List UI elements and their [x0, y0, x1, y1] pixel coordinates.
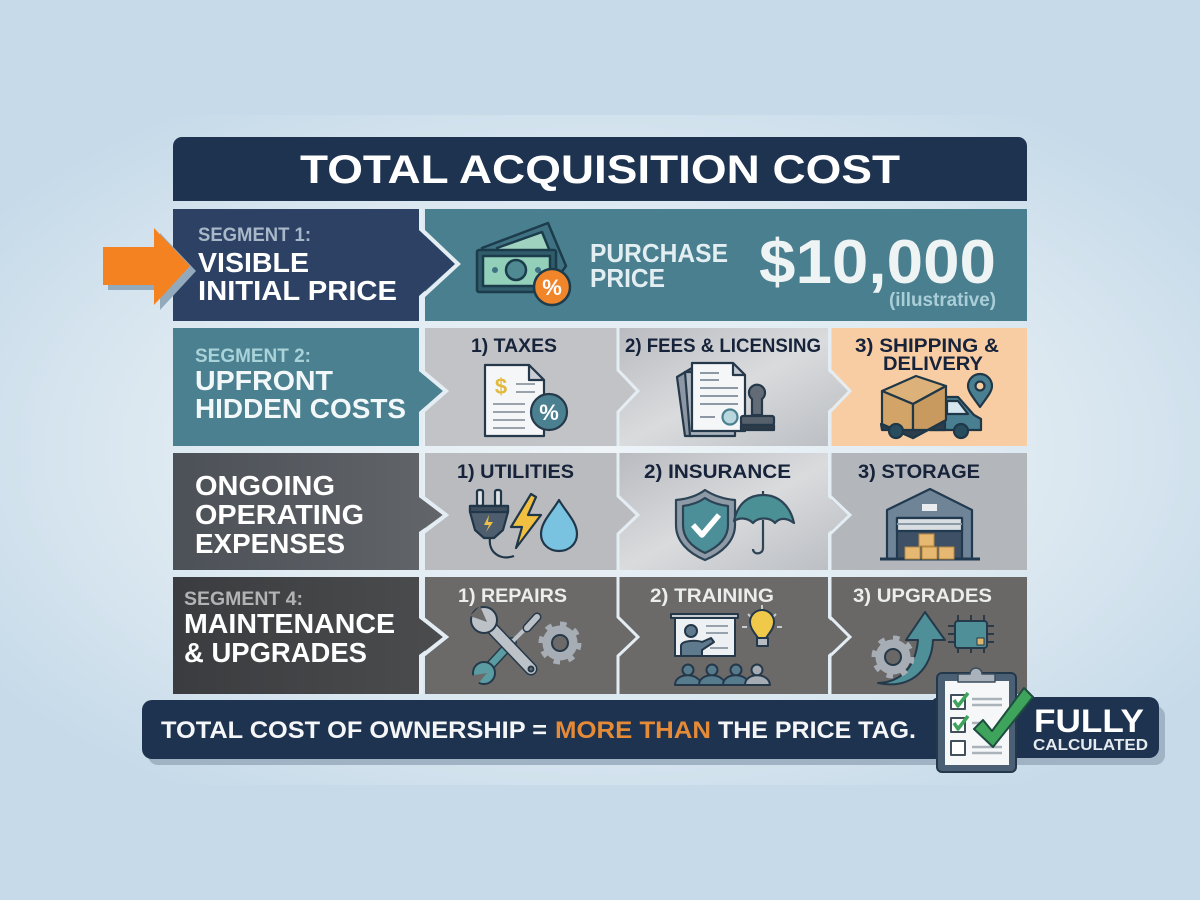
- panel: segment 2: UPFRONT: [195, 365, 333, 396]
- panel: segment 2: [173, 328, 446, 446]
- purchase price label: [590, 238, 728, 293]
- purchase price label: PRICE: [590, 263, 665, 293]
- footer banner: FULLY: [1034, 703, 1144, 739]
- cell: shipping and delivery: [831, 328, 1027, 446]
- cell: storage: [831, 453, 1027, 570]
- cell: training: [619, 577, 850, 694]
- cell: shipping and delivery: 3) SHIPPING &: [855, 336, 999, 357]
- panel: segment 3: EXPENSES: [195, 528, 345, 559]
- panel: segment 4: & UPGRADES: [184, 637, 367, 668]
- cell: taxes: [425, 328, 638, 446]
- orange arrow: [103, 228, 196, 310]
- cell: utilities: [425, 453, 638, 570]
- panel: segment 2: HIDDEN COSTS: [195, 393, 406, 424]
- panel: segment 1: INITIAL PRICE: [198, 275, 397, 306]
- icon: banknotes with percent badge: [477, 223, 570, 305]
- amount: (illustrative): [889, 290, 996, 311]
- row 1: visible initial price: [173, 209, 1027, 321]
- icon: tax document: [485, 365, 567, 436]
- cell: utilities: 1) UTILITIES: [457, 462, 574, 483]
- amount: $10,000: [759, 228, 996, 297]
- cell: repairs: 1) REPAIRS: [458, 586, 567, 607]
- panel: segment 3: ONGOING: [195, 470, 335, 501]
- icon: presenter, audience, bulb: [671, 605, 782, 685]
- cell: insurance: [619, 453, 850, 570]
- cell: upgrades: 3) UPGRADES: [853, 586, 992, 607]
- panel: segment 1: SEGMENT 1:: [198, 225, 311, 246]
- icon: gear, arrow and chip: [874, 612, 994, 684]
- footer banner: TOTAL COST OF OWNERSHIP =: [161, 717, 547, 744]
- panel: segment 4: MAINTENANCE: [184, 608, 395, 639]
- icon: wrench, screwdriver, gear: [469, 606, 579, 686]
- icon: banknotes with percent badge: %: [542, 275, 562, 300]
- cell: training: 2) TRAINING: [650, 586, 774, 607]
- cell: taxes: 1) TAXES: [471, 336, 557, 357]
- icon: clipboard checklist: [937, 668, 1033, 772]
- footer banner: MORE THAN: [555, 717, 711, 744]
- purchase price label: PURCHASE: [590, 238, 728, 268]
- panel: segment 3: [173, 453, 446, 570]
- cell: insurance: 2) INSURANCE: [644, 462, 791, 483]
- title bar: TOTAL ACQUISITION COST: [300, 148, 900, 192]
- panel: segment 1: VISIBLE: [198, 247, 309, 278]
- panel: segment 4: [173, 577, 446, 694]
- cell: fees and licensing: 2) FEES & LICENSING: [625, 336, 821, 357]
- panel: segment 2: SEGMENT 2:: [195, 346, 311, 367]
- row 3: ongoing operating expenses: [173, 453, 1027, 570]
- panel: segment 3: OPERATING: [195, 499, 364, 530]
- icon: plug, lightning, water drop: [470, 490, 577, 557]
- icon: shield and umbrella: [676, 490, 794, 560]
- footer banner: CALCULATED: [1033, 737, 1148, 754]
- title bar: [173, 137, 1027, 201]
- cell: upgrades: [831, 577, 1027, 694]
- icon: documents and stamp: [677, 363, 774, 436]
- cell: fees and licensing: [619, 328, 850, 446]
- cell: repairs: [425, 577, 638, 694]
- row 2: upfront hidden costs: [173, 328, 1027, 446]
- panel: purchase price: [425, 209, 1027, 321]
- icon: delivery truck: [881, 374, 992, 438]
- panel: segment 4: SEGMENT 4:: [184, 589, 303, 610]
- row 4: maintenance and upgrades: [173, 577, 1027, 694]
- icon: tax document: $: [495, 374, 507, 399]
- panel: segment 1: [173, 209, 458, 321]
- icon: warehouse: [880, 489, 980, 559]
- cell: shipping and delivery: DELIVERY: [883, 354, 983, 375]
- footer banner: [142, 697, 1165, 765]
- icon: tax document: %: [539, 400, 559, 425]
- cell: storage: 3) STORAGE: [858, 462, 980, 483]
- footer banner: THE PRICE TAG.: [718, 717, 916, 744]
